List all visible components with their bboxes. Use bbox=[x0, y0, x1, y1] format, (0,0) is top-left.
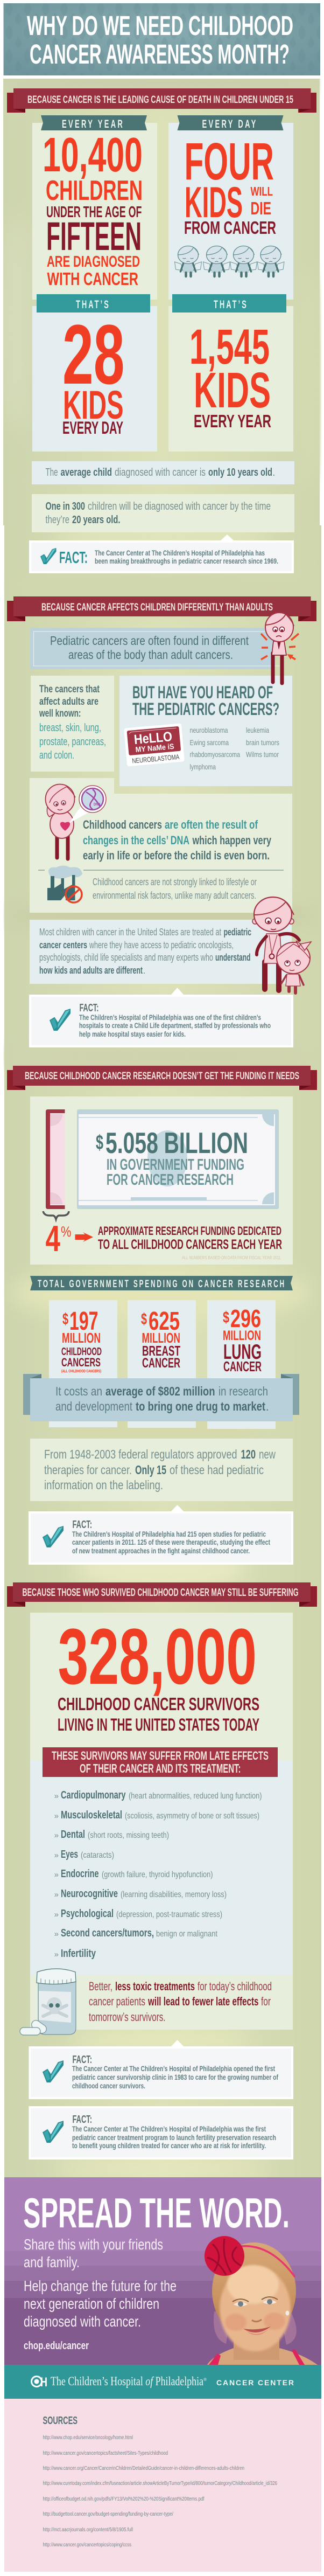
text panel: approved therapies bbox=[30, 1439, 293, 1501]
panel: cancers that affect adults: and colon. bbox=[39, 749, 74, 761]
list: late effects: (heart abnormalities, reduced lung function) bbox=[129, 1792, 262, 1801]
fact callout 3: of new treatment approaches in the fight against childhood cancer. bbox=[72, 1547, 250, 1555]
panel: DNA changes: Childhood cancers are not strongly linked to lifestyle or bbox=[93, 877, 257, 887]
panel: cancers that affect adults: affect adults are bbox=[39, 696, 98, 707]
column: breast cancer: MILLION bbox=[142, 1330, 180, 1346]
list: late effects: » bbox=[54, 1792, 59, 1801]
column: lung cancer: MILLION bbox=[223, 1328, 261, 1343]
panel: DNA changes: which happen very bbox=[192, 834, 272, 847]
icon: hello name tag bbox=[124, 723, 185, 766]
panel: 28 kids every day: KIDS bbox=[63, 383, 124, 427]
list: source links: http://www.cancer.gov/cancertopics/factsheet/Sites-Types/childhood bbox=[43, 2450, 168, 2456]
bill: total funding: IN GOVERNMENT FUNDING bbox=[107, 1156, 244, 1174]
fact callout 3: FACT: bbox=[72, 1519, 92, 1531]
arrow bbox=[75, 1232, 93, 1242]
panel: every day: WILL bbox=[251, 184, 273, 198]
column: childhood cancers: $ bbox=[62, 1310, 68, 1328]
list: late effects: (cataracts) bbox=[81, 1851, 114, 1860]
title text bbox=[27, 10, 293, 70]
banner: cost per drug: It costs an bbox=[55, 1384, 102, 1398]
panel: pediatric cancers location: areas of the body than adult cancers. bbox=[68, 648, 233, 662]
list: late effects: Musculoskeletal bbox=[61, 1809, 122, 1821]
panel: pediatric cancer centers: how kids and adults are different bbox=[39, 965, 143, 976]
column: lung cancer: LUNG bbox=[223, 1341, 262, 1364]
banner: cost per drug: and development bbox=[55, 1399, 132, 1413]
fact callout 2: The Children’s Hospital of Philadelphia was one of the first children’s bbox=[79, 1013, 261, 1022]
text panel: approved therapies: therapies for cancer. bbox=[44, 1463, 132, 1477]
panel: every year: CHILDREN bbox=[46, 175, 143, 206]
fact callout 1 bbox=[29, 534, 294, 573]
icon: checkmark bbox=[50, 1009, 71, 1031]
list: late effects: benign or malignant bbox=[156, 1929, 217, 1939]
text: better treatments: for today’s childhood bbox=[198, 1980, 272, 1993]
panel: pediatric cancer centers: understand bbox=[215, 952, 251, 963]
icon: hello name tag: NEUROBLASTOMA bbox=[132, 753, 180, 765]
ribbon: total government spending: TOTAL GOVERNMENT SPENDING ON CANCER RESEARCH bbox=[38, 1279, 284, 1290]
panel: pediatric cancers location: Pediatric cancers are often found in different bbox=[50, 634, 249, 648]
fact callout 2 bbox=[29, 988, 293, 1047]
icon: checkmark bbox=[43, 2060, 64, 2082]
text panel: approved therapies: From 1948-2003 federal regulators approved bbox=[44, 1447, 237, 1461]
panel: spread the word: chop.edu/cancer bbox=[24, 2340, 89, 2352]
statistic: 4 percent: 4 bbox=[45, 1218, 60, 1259]
icon: doctor and girl bbox=[252, 897, 311, 993]
panel: pediatric cancer centers: Most children with cancer in the United States are treated at bbox=[39, 927, 221, 938]
brace bbox=[43, 1211, 69, 1219]
panel: pediatric cancer centers: . bbox=[143, 965, 146, 976]
panel: sources bbox=[4, 2399, 321, 2572]
fact callout 3: cancer patients in 2011. 125 of these were therapeutic, studying the effect bbox=[72, 1538, 270, 1546]
text panel: approved therapies: information on the labeling. bbox=[44, 1478, 163, 1492]
title banner bbox=[3, 3, 320, 75]
band: that's bbox=[172, 294, 286, 313]
panel: cancers that affect adults: breast, skin, lung, bbox=[39, 722, 101, 734]
fact callout 5: to benefit young children treated for cancer who are at risk for infertility. bbox=[72, 2142, 266, 2150]
icon: four angel children bbox=[174, 246, 284, 276]
column: childhood cancers bbox=[49, 1300, 117, 1427]
column: childhood cancers: CHILDHOOD bbox=[61, 1346, 102, 1358]
panel: every year: FIFTEEN bbox=[46, 214, 142, 259]
list: source links: http://www.chop.edu/service/oncology/home.html bbox=[43, 2435, 133, 2441]
list: late effects: » bbox=[54, 1929, 59, 1939]
fact callout 3 bbox=[29, 1505, 293, 1565]
panel: every year: WITH CANCER bbox=[47, 269, 138, 289]
ribbon: every year bbox=[41, 115, 147, 130]
footer: hospital logo bar bbox=[4, 2365, 321, 2399]
text panel: approved therapies: of these had pediatric bbox=[170, 1463, 264, 1477]
panel: every day: FROM CANCER bbox=[184, 218, 276, 238]
list: late effects: Cardiopulmonary bbox=[61, 1789, 126, 1801]
column: breast cancer bbox=[128, 1300, 196, 1428]
footer: hospital logo bar: ® bbox=[203, 2377, 207, 2382]
text: better treatments: for bbox=[261, 1995, 271, 2008]
section ribbon: research funding bbox=[7, 1066, 317, 1090]
panel: spread the word: next generation of children bbox=[24, 2295, 159, 2312]
list of pediatric cancers: Ewing sarcoma bbox=[189, 738, 229, 747]
panel: cancers that affect adults: well known: bbox=[39, 708, 81, 719]
ribbon: every year: EVERY YEAR bbox=[62, 117, 123, 130]
panel: pediatric cancer centers: where they have access to pediatric oncologists, bbox=[89, 940, 234, 950]
panel: pediatric cancers location bbox=[30, 628, 281, 669]
list: late effects: (growth failure, thyroid hypofunction) bbox=[102, 1870, 213, 1879]
text: better treatments: less toxic treatments bbox=[115, 1980, 195, 1993]
text: better treatments: Better, bbox=[89, 1980, 112, 1993]
statistic: 4 percent: % bbox=[61, 1224, 71, 1240]
text panel: average child: . bbox=[272, 467, 276, 478]
panel: 28 kids every day: EVERY DAY bbox=[62, 418, 123, 438]
bill: total funding: 5.058 BILLION bbox=[105, 1126, 248, 1159]
list: late effects: » bbox=[54, 1950, 59, 1959]
panel: survivors bbox=[20, 1613, 293, 2035]
panel: every day bbox=[168, 115, 293, 300]
list: late effects: » bbox=[54, 1910, 59, 1919]
column: childhood cancers: 197 bbox=[69, 1307, 98, 1336]
icon: hello name tag: HeLLO bbox=[133, 729, 173, 747]
section ribbon: survivors bbox=[7, 1582, 317, 1607]
banner: cost per drug: in research bbox=[219, 1384, 268, 1398]
fact callout 2: FACT: bbox=[80, 1002, 99, 1014]
text panel: average child: diagnosed with cancer is bbox=[115, 467, 206, 478]
text: better treatments: tomorrow’s survivors. bbox=[89, 2010, 166, 2024]
list: late effects: » bbox=[54, 1851, 59, 1860]
icon: girl with DNA magnifier: DNA bbox=[94, 803, 101, 807]
text panel: one in 300: they’re bbox=[45, 514, 69, 526]
fact callout 4: childhood cancer survivors. bbox=[72, 2082, 145, 2090]
section ribbon: leading cause bbox=[7, 88, 316, 113]
panel: sources: SOURCES bbox=[43, 2415, 78, 2427]
text: better treatments: cancer patients bbox=[89, 1995, 145, 2008]
list of pediatric cancers: neuroblastoma bbox=[189, 726, 228, 734]
logo: CHOP: H bbox=[40, 2375, 47, 2390]
text panel: average child: only 10 years old bbox=[208, 467, 272, 478]
panel: pediatric cancer centers bbox=[30, 920, 292, 984]
list of pediatric cancers: leukemia bbox=[246, 726, 269, 734]
column: lung cancer bbox=[207, 1300, 276, 1429]
text panel: one in 300: 20 years old. bbox=[72, 514, 121, 526]
column: lung cancer: 296 bbox=[230, 1304, 261, 1332]
list: source links: http://www.cancer.gov/cancertopics/coping/ccss bbox=[43, 2542, 131, 2548]
box: late effects heading bbox=[43, 1747, 278, 1777]
icon: checkmark bbox=[40, 548, 56, 564]
fact callout 4: FACT: bbox=[72, 2054, 92, 2066]
ribbon: every day: EVERY DAY bbox=[202, 117, 256, 130]
panel: cancers that affect adults bbox=[31, 676, 114, 772]
band: that's: THAT’S bbox=[214, 298, 246, 311]
panel: 1,545 kids every year: EVERY YEAR bbox=[194, 411, 271, 431]
column: childhood cancers: (ALL CHILDHOOD CANCERS) bbox=[61, 1370, 101, 1373]
bill: 4 percent slice bbox=[46, 1109, 65, 1209]
list of pediatric cancers: lymphoma bbox=[189, 762, 216, 771]
list: late effects: (learning disabilities, memory loss) bbox=[121, 1890, 227, 1899]
panel: 28 kids every day bbox=[32, 294, 157, 452]
panel: pediatric cancer centers: psychologists, child life specialists and many experts who bbox=[39, 952, 213, 963]
panel: every day: DIE bbox=[251, 198, 271, 218]
bill: total funding: $ bbox=[96, 1131, 103, 1154]
icon: hello name tag: MY NaMe iS bbox=[135, 742, 174, 754]
band: that's bbox=[37, 294, 150, 313]
list: late effects: (depression, post-traumatic stress) bbox=[116, 1910, 222, 1919]
column: breast cancer: CANCER bbox=[142, 1356, 180, 1371]
bill: total funding: FOR CANCER RESEARCH bbox=[107, 1171, 234, 1189]
bill: total funding bbox=[77, 1109, 279, 1209]
fact callout 4 bbox=[29, 2040, 293, 2099]
column: breast cancer: $ bbox=[141, 1310, 147, 1328]
list of pediatric cancers: brain tumors bbox=[246, 738, 279, 747]
panel: every year: ARE DIAGNOSED bbox=[47, 253, 140, 270]
panel: 28 kids every day: 28 bbox=[62, 308, 125, 402]
panel: DNA changes: changes in the cells’ DNA bbox=[83, 834, 189, 847]
panel: DNA changes: environmental risk factors, unlike many adult cancers. bbox=[93, 890, 256, 901]
panel: every year: 10,400 bbox=[43, 128, 143, 182]
panel: pediatric cancer centers: pediatric bbox=[224, 927, 251, 938]
logo: CHOP bbox=[31, 2375, 47, 2390]
fact callout 1: The Cancer Center at The Children’s Hospital of Philadelphia has bbox=[95, 549, 265, 557]
box: late effects heading: OF THEIR CANCER AND ITS TREATMENT: bbox=[80, 1761, 241, 1775]
text panel: one in 300: One in 300 bbox=[45, 501, 85, 512]
list: late effects: Second cancers/tumors, bbox=[61, 1927, 154, 1939]
panel: have you heard of the pediatric cancers bbox=[119, 676, 292, 786]
banner: cost per drug: to bring one drug to market bbox=[136, 1399, 265, 1413]
list: late effects: Infertility bbox=[61, 1948, 96, 1960]
panel: government funding bbox=[30, 1096, 293, 1265]
panel: 1,545 kids every year: 1,545 bbox=[189, 320, 270, 374]
list: late effects: Dental bbox=[61, 1829, 85, 1841]
text panel: average child: average child bbox=[60, 467, 112, 478]
list: source links bbox=[43, 2435, 277, 2548]
banner: cost per drug: . bbox=[266, 1399, 269, 1413]
text panel: average child: The bbox=[45, 467, 58, 478]
column: childhood cancers: MILLION bbox=[62, 1330, 101, 1346]
list: source links: http://budgettool.cancer.gov/budget-spending/funding-by-cancer-type/ bbox=[43, 2511, 173, 2517]
panel: spread the word: and family. bbox=[24, 2254, 80, 2271]
column: lung cancer: CANCER bbox=[223, 1358, 262, 1374]
list of pediatric cancers: rhabdomyosarcoma bbox=[189, 750, 240, 759]
list: late effects: » bbox=[54, 1831, 59, 1840]
fact callout 5 bbox=[29, 2106, 293, 2160]
fact callout 1: FACT: bbox=[59, 548, 88, 567]
panel: government funding: ALL NUMBERS BASED ON DATA FROM FISCAL YEAR 2011 bbox=[182, 1255, 281, 1260]
panel: spread the word bbox=[4, 2177, 321, 2365]
ribbon: every day bbox=[178, 115, 283, 130]
banner: cost per drug: average of $802 million bbox=[105, 1384, 215, 1398]
banner: cost per drug bbox=[23, 1374, 299, 1421]
text panel: approved therapies: 120 bbox=[241, 1447, 256, 1461]
panel: spread the word: Share this with your friends bbox=[24, 2236, 163, 2253]
icon: poison pill bottle bbox=[20, 1969, 76, 2035]
list: late effects: Endocrine bbox=[61, 1868, 99, 1880]
list: late effects: » bbox=[54, 1870, 59, 1879]
column: lung cancer: $ bbox=[223, 1309, 229, 1327]
panel: DNA changes: are often the result of bbox=[165, 818, 258, 831]
icon: girl with DNA magnifier bbox=[45, 784, 106, 859]
panel: cancers that affect adults: prostate, pancreas, bbox=[39, 736, 106, 748]
panel: DNA changes bbox=[30, 778, 292, 913]
list: late effects: » bbox=[54, 1811, 59, 1821]
panel: cancers that affect adults: The cancers that bbox=[39, 684, 100, 695]
list: late effects: (scoliosis, asymmetry of bone or soft tissues) bbox=[125, 1811, 259, 1821]
list of pediatric cancers bbox=[189, 726, 279, 771]
list: late effects: Neurocognitive bbox=[61, 1888, 118, 1900]
section ribbon: affects children differently bbox=[7, 596, 316, 621]
text panel: approved therapies: Only 15 bbox=[135, 1463, 166, 1477]
text panel: average child bbox=[32, 461, 294, 484]
icon: boy with arrows pointing at body bbox=[261, 613, 299, 683]
text: better treatments bbox=[89, 1980, 272, 2024]
footer: hospital logo bar: CANCER CENTER bbox=[216, 2378, 294, 2387]
column: breast cancer: BREAST bbox=[142, 1343, 180, 1359]
panel: 1,545 kids every year: KIDS bbox=[194, 362, 271, 418]
list: late effects bbox=[54, 1789, 262, 1960]
list: source links: http://mct.aacrjournals.org/content/5/8/1905.full bbox=[43, 2527, 133, 2533]
panel: 1,545 kids every year bbox=[168, 294, 293, 452]
icon: checkmark bbox=[43, 2121, 64, 2143]
list: source links: http://www.cancer.org/Cancer/CancerinChildren/DetailedGuide/cancer-in-children-differences-adults-children bbox=[43, 2466, 244, 2471]
list: late effects: Psychological bbox=[61, 1908, 114, 1920]
list: late effects: (short roots, missing teeth) bbox=[88, 1831, 169, 1840]
panel: spread the word: diagnosed with cancer. bbox=[24, 2313, 141, 2330]
text panel: one in 300: children will be diagnosed with cancer by the time bbox=[88, 501, 271, 512]
panel: DNA changes: Childhood cancers bbox=[83, 818, 162, 831]
footer: hospital logo bar: The Children’s Hospital of Philadelphia bbox=[51, 2374, 203, 2388]
panel: spread the word: Help change the future for the bbox=[24, 2278, 177, 2294]
list: late effects: » bbox=[54, 1890, 59, 1899]
fact callout 2: help make hospital stays easier for kids. bbox=[79, 1030, 186, 1038]
list: late effects: Eyes bbox=[61, 1849, 78, 1860]
icon: checkmark bbox=[43, 1526, 64, 1547]
panel: every year bbox=[32, 115, 157, 300]
column: childhood cancers: CANCERS bbox=[61, 1356, 101, 1369]
fact callout 5: FACT: bbox=[72, 2114, 92, 2126]
illustration: smiling girl with red flower bbox=[205, 2236, 318, 2365]
icon: factory with prohibited sign bbox=[47, 865, 82, 902]
band: that's: THAT’S bbox=[76, 298, 109, 311]
panel: every day: KIDS bbox=[185, 178, 243, 227]
list of pediatric cancers: Wilms tumor bbox=[246, 750, 279, 759]
panel: every year: UNDER THE AGE OF bbox=[46, 204, 142, 221]
panel: DNA changes: early in life or before the child is even born. bbox=[83, 849, 270, 862]
text panel: approved therapies: new bbox=[259, 1447, 276, 1461]
panel: pediatric cancer centers: cancer centers bbox=[39, 940, 87, 950]
text: better treatments: will lead to fewer late effects bbox=[147, 1995, 258, 2008]
list: source links: http://officeofbudget.od.nih.gov/pdfs/FY13/Vol%202%20-%20Significant%20Items.pdf bbox=[43, 2496, 205, 2502]
column: breast cancer: 625 bbox=[149, 1307, 180, 1336]
text panel: one in 300 bbox=[32, 494, 294, 532]
